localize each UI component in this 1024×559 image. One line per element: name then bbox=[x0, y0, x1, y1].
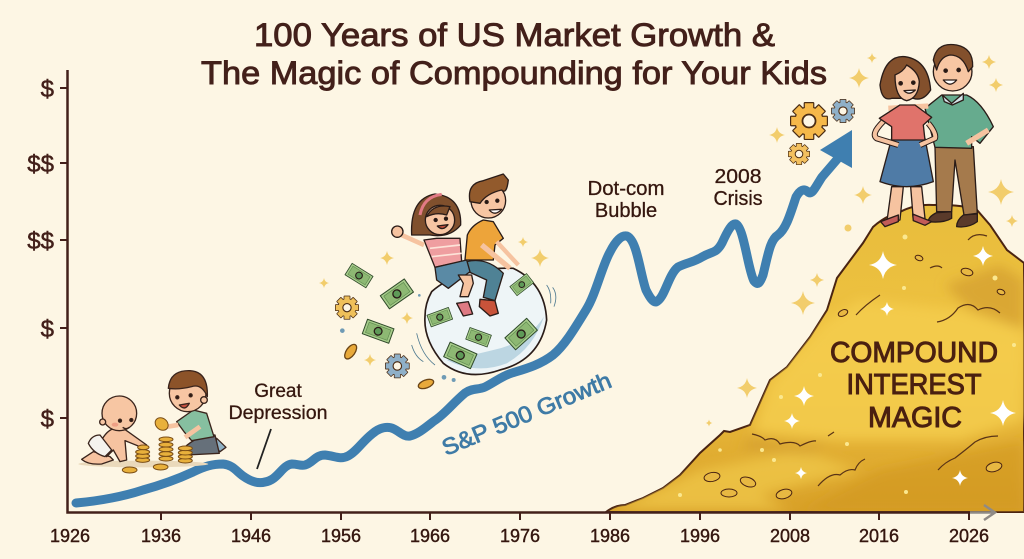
mother bbox=[875, 57, 935, 227]
title: The Magic of Compounding for Your Kids bbox=[201, 55, 827, 91]
label: compound interest magic bbox=[830, 337, 998, 434]
boy bbox=[465, 174, 518, 316]
label: S&P 500 growth: S&P 500 Growth bbox=[438, 367, 615, 461]
illustration: parents standing on the pile bbox=[875, 44, 993, 227]
x axis labels: 1946 bbox=[231, 526, 271, 546]
baby bbox=[82, 396, 147, 464]
axes bbox=[60, 70, 970, 520]
label: compound interest magic: MAGIC bbox=[868, 402, 962, 434]
gold ripple lines bbox=[752, 235, 1000, 486]
annotation: 2008 Crisis: 2008 bbox=[714, 166, 762, 188]
annotation: 2008 Crisis bbox=[714, 166, 762, 210]
white sparkles on the pile bbox=[784, 246, 1016, 486]
y axis labels: $ bbox=[41, 316, 54, 343]
annotation: 2008 Crisis: Crisis bbox=[714, 188, 762, 210]
annotation: Dot-com Bubble: Dot-com bbox=[588, 178, 664, 200]
x axis labels: 1936 bbox=[141, 526, 181, 546]
small gears bbox=[336, 296, 409, 378]
label: compound interest magic: COMPOUND bbox=[830, 337, 998, 369]
motion lines bbox=[412, 285, 556, 365]
girl bbox=[392, 194, 473, 316]
sparkles around the snowball bbox=[319, 237, 549, 366]
label: compound interest magic: INTEREST bbox=[846, 369, 982, 401]
coin stacks bbox=[122, 415, 192, 473]
y axis labels: $$ bbox=[27, 151, 54, 178]
x axis labels: 1976 bbox=[500, 526, 540, 546]
y axis labels: $ bbox=[41, 76, 54, 103]
loose coins bbox=[342, 342, 435, 390]
coins on the pile bbox=[703, 254, 1006, 500]
father bbox=[888, 44, 993, 227]
snowball bbox=[425, 268, 547, 375]
y axis labels: $$ bbox=[27, 228, 54, 255]
x axis labels: 1986 bbox=[590, 526, 630, 546]
axis arrow bbox=[970, 505, 995, 520]
x axis labels: 2008 bbox=[770, 526, 810, 546]
y axis labels bbox=[27, 76, 54, 433]
x axis labels: 2016 bbox=[859, 526, 899, 546]
title: 100 Years of US Market Growth & bbox=[254, 17, 775, 53]
x axis labels: 1956 bbox=[321, 526, 361, 546]
annotation: Great Depression bbox=[228, 381, 328, 469]
x axis labels bbox=[50, 526, 989, 546]
title bbox=[201, 17, 827, 91]
toddler bbox=[163, 371, 226, 455]
x axis labels: 1996 bbox=[680, 526, 720, 546]
gold mountain: compound interest bbox=[606, 205, 1024, 512]
annotation: Great Depression: Great bbox=[254, 381, 302, 402]
illustration: kids riding money snowball bbox=[336, 174, 556, 390]
illustration: gears by arrow bbox=[789, 100, 854, 164]
flying bills bbox=[345, 263, 413, 343]
y axis labels: $ bbox=[41, 406, 54, 433]
sparkles around the parents and pile bbox=[706, 53, 1018, 426]
x axis labels: 1926 bbox=[50, 526, 90, 546]
illustration: baby and toddler with coins bbox=[78, 371, 226, 473]
bills on the snowball bbox=[427, 274, 537, 369]
annotation: Great Depression: Depression bbox=[228, 403, 328, 424]
S&P 500 growth line with arrow bbox=[76, 156, 840, 503]
arrowhead bbox=[820, 130, 852, 168]
dots bbox=[340, 294, 456, 382]
x axis labels: 2026 bbox=[949, 526, 989, 546]
annotation: Dot-com Bubble bbox=[588, 178, 664, 222]
x axis labels: 1966 bbox=[410, 526, 450, 546]
annotation: Dot-com Bubble: Bubble bbox=[595, 200, 657, 222]
